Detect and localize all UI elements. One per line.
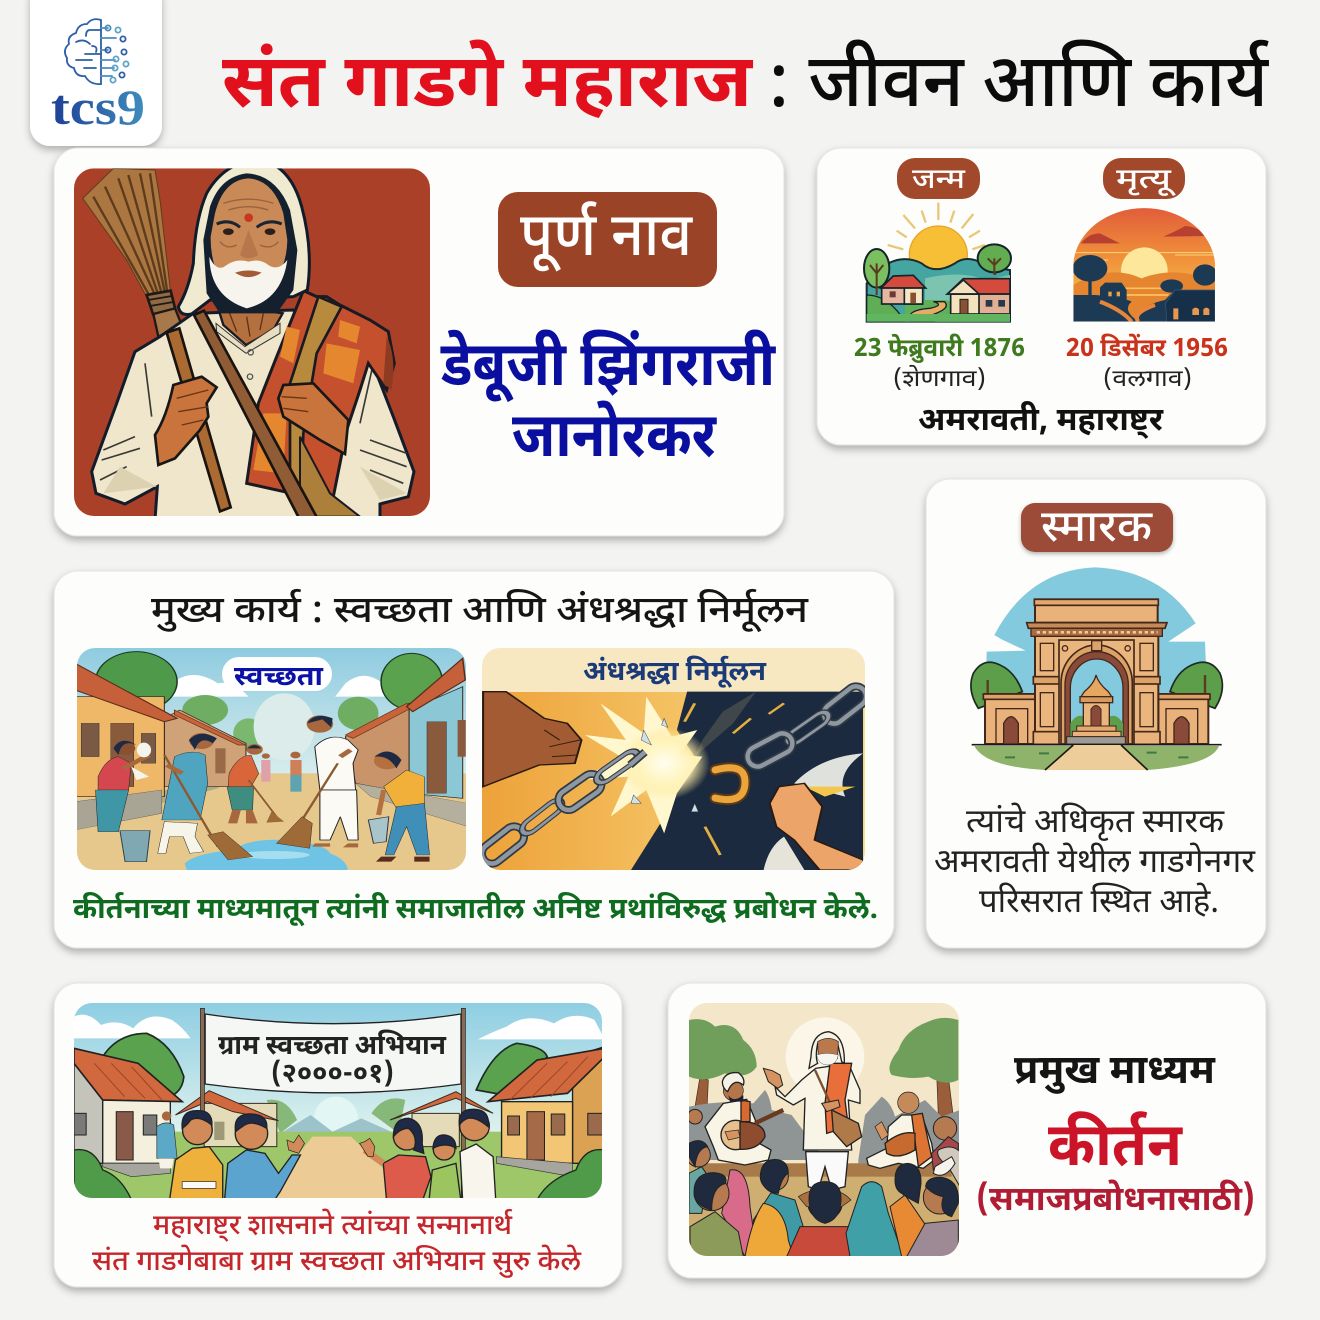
chain: left part xyxy=(478,748,645,868)
musician with veena xyxy=(705,1073,783,1165)
banner text: (२०००-०१) xyxy=(271,1059,394,1094)
name label pill xyxy=(498,192,717,287)
full name text xyxy=(440,328,777,482)
broom head xyxy=(83,168,171,300)
logo card xyxy=(30,0,162,146)
bucket xyxy=(120,831,150,862)
district and state: अमरावती, महाराष्ट्र xyxy=(918,401,1164,444)
superstition label: अंधश्रद्धा निर्मूलन xyxy=(583,655,767,692)
icon: sunset village xyxy=(1072,203,1217,323)
kurta xyxy=(92,310,414,520)
birth pill: जन्म xyxy=(912,164,966,200)
cleanliness label: स्वच्छता xyxy=(234,662,324,697)
kirtan text xyxy=(976,1048,1255,1224)
illustration: breaking chains xyxy=(478,648,870,870)
red caption: महाराष्ट्र शासनाने त्यांच्या सन्मानार्थ xyxy=(153,1208,513,1246)
birth date: 23 फेब्रुवारी 1876 xyxy=(854,333,1025,367)
birth pill xyxy=(897,158,980,200)
seated listener xyxy=(867,1092,934,1168)
banner xyxy=(200,1008,465,1202)
panel: birth and death xyxy=(817,148,1266,445)
name label pill: पूर्ण नाव xyxy=(520,201,694,280)
head cloth xyxy=(178,159,309,315)
death place: (वलगाव) xyxy=(1103,366,1192,396)
face xyxy=(210,178,288,268)
icon: circuit brain xyxy=(65,19,129,84)
villagers xyxy=(169,1109,496,1202)
panel: full name xyxy=(54,148,784,536)
right hand xyxy=(278,383,348,454)
chain: right part xyxy=(744,682,870,770)
person: woman cleaning wall xyxy=(96,741,151,832)
scarf xyxy=(247,291,394,497)
death pill: मृत्यू xyxy=(1116,164,1176,200)
kirtan text: प्रमुख माध्यम xyxy=(1014,1048,1216,1100)
neck and collar xyxy=(217,303,283,345)
logo wordmark: tcs9 xyxy=(51,79,145,135)
cleanliness label xyxy=(222,657,332,697)
kirtan text: (समाजप्रबोधनासाठी) xyxy=(976,1179,1255,1224)
title: संत गाडगे महाराज xyxy=(222,39,754,137)
person: man in white with broom xyxy=(277,715,358,848)
icon: memorial arch xyxy=(971,567,1222,770)
death date: 20 डिसेंबर 1956 xyxy=(1066,333,1228,367)
broom handle xyxy=(167,328,231,511)
main work heading: मुख्य कार्य : स्वच्छता आणि अंधश्रद्धा निर्मूलन xyxy=(151,588,809,638)
illustration: village banner xyxy=(74,1000,605,1202)
panel: village cleanliness campaign xyxy=(54,983,622,1287)
person: woman sweeping xyxy=(158,733,253,860)
memorial description: त्यांचे अधिकृत स्मारक xyxy=(966,801,1225,846)
shoulder strap xyxy=(194,311,318,520)
banner text: ग्राम स्वच्छता अभियान xyxy=(218,1030,447,1066)
person: man with broom in orange xyxy=(227,744,284,823)
illustration: village cleaning xyxy=(75,647,468,873)
broken gold link xyxy=(715,768,745,800)
memorial pill: स्मारक xyxy=(1041,502,1153,559)
left arm fist xyxy=(483,692,582,787)
title xyxy=(222,39,1270,137)
old man in background xyxy=(157,1111,177,1168)
memorial description xyxy=(934,801,1256,926)
memorial description: अमरावती येथील गाडगेनगर xyxy=(934,841,1256,886)
red caption xyxy=(92,1208,582,1282)
icon: sunrise village xyxy=(864,203,1011,322)
memorial description: परिसरात स्थित आहे. xyxy=(979,881,1219,926)
full name text: जानोरकर xyxy=(512,400,717,482)
distant people xyxy=(261,760,270,782)
foreground crowd xyxy=(686,1109,960,1257)
right arm fist and cloth xyxy=(794,753,863,797)
banner text xyxy=(218,1030,447,1094)
kirtan text: कीर्तन xyxy=(1048,1111,1183,1190)
portrait of Gadge Maharaj xyxy=(74,159,430,520)
left hand xyxy=(155,377,217,465)
green caption: कीर्तनाच्या माध्यमातून त्यांनी समाजातील अनिष्ट प्रथांविरुद्ध प्रबोधन केले. xyxy=(73,891,878,930)
illustration: kirtan gathering xyxy=(686,1002,960,1260)
kirtankar figure xyxy=(763,1032,862,1190)
death pill xyxy=(1103,158,1185,200)
title: : जीवन आणि कार्य xyxy=(768,39,1270,137)
panel: main work xyxy=(54,571,894,948)
person: woman with bucket xyxy=(368,752,430,862)
full name text: डेबूजी झिंगराजी xyxy=(440,328,777,411)
red caption: संत गाडगेबाबा ग्राम स्वच्छता अभियान सुरु केले xyxy=(92,1244,582,1282)
birth place: (शेणगाव) xyxy=(893,365,986,396)
panel: main medium kirtan xyxy=(668,983,1266,1278)
panel: memorial xyxy=(926,479,1266,948)
